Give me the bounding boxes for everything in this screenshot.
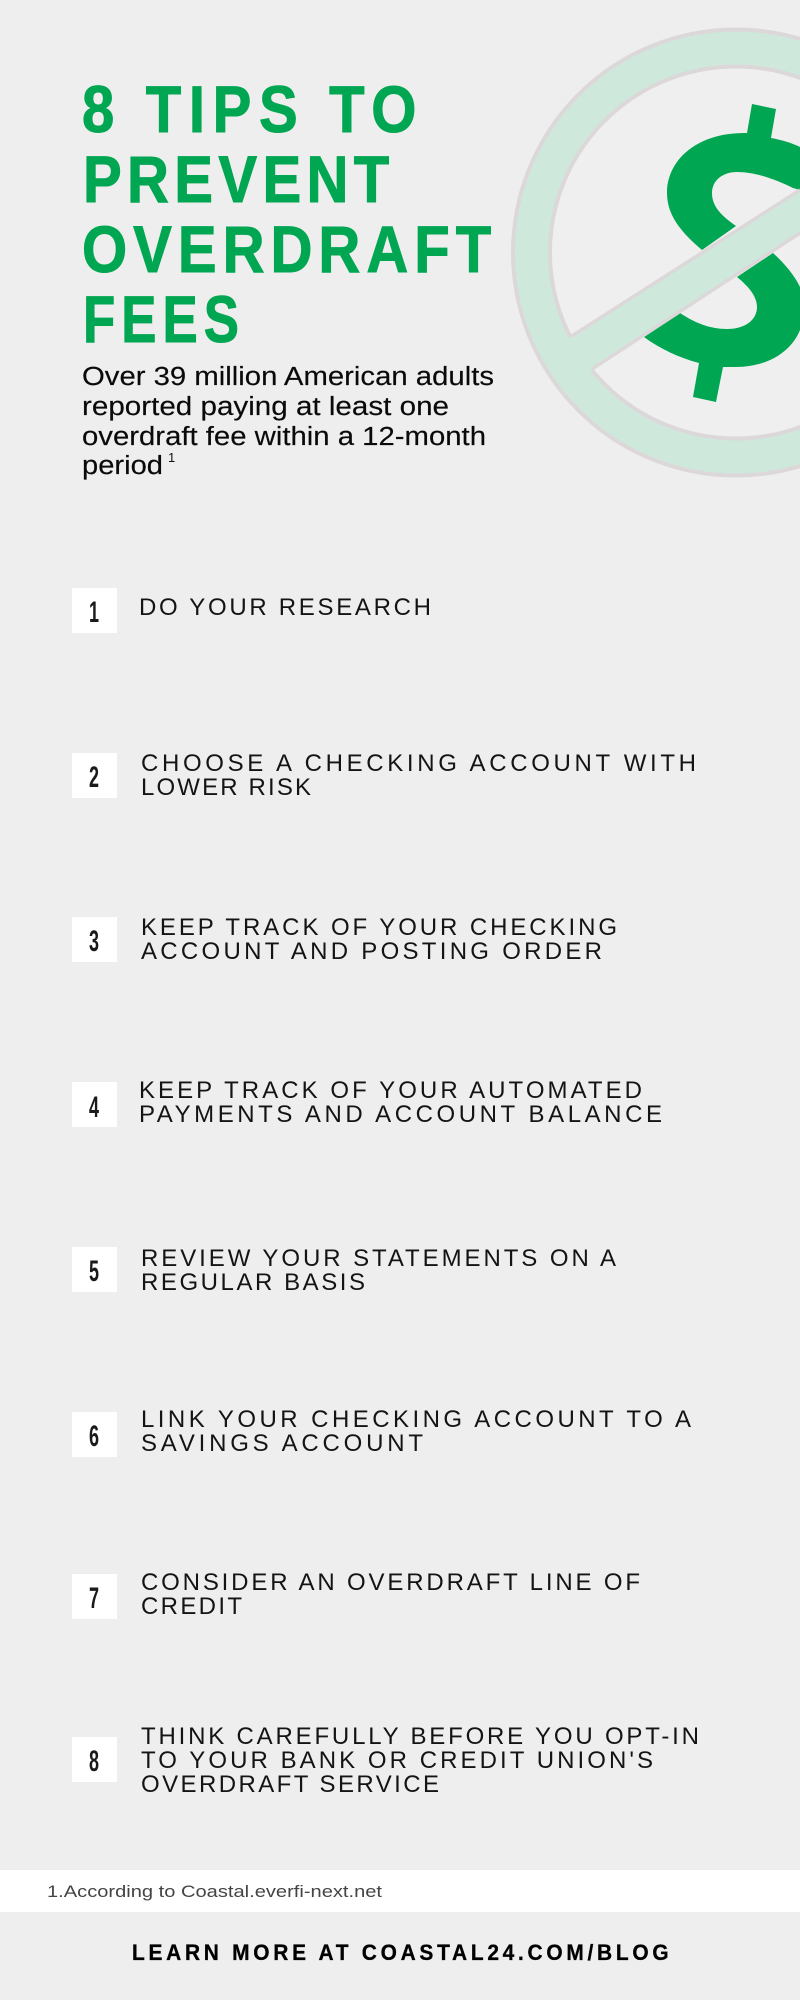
icon: crossed-out dollar sign	[513, 30, 800, 476]
tip 4	[72, 1077, 662, 1128]
number badge 7	[72, 1574, 117, 1619]
title	[82, 74, 491, 356]
number badge 3	[72, 917, 117, 962]
subtitle text block: Over 39 million American adults	[82, 363, 494, 391]
tip 1 text: DO YOUR RESEARCH	[139, 594, 431, 621]
number badge 5	[72, 1247, 117, 1292]
subtitle text block: period	[82, 452, 163, 480]
tip 5 text	[141, 1245, 616, 1296]
tip 8 text: THINK CAREFULLY BEFORE YOU OPT-IN	[141, 1723, 699, 1750]
tip 7 text	[141, 1569, 640, 1620]
tip 4 text	[139, 1077, 662, 1128]
tip 5	[72, 1245, 616, 1296]
footnote strip: 1.According to Coastal.everfi-next.net	[47, 1882, 382, 1901]
tip 3	[72, 914, 617, 965]
title: FEES	[83, 282, 239, 356]
tip 2	[72, 750, 696, 801]
tip 2 text	[141, 750, 696, 801]
tip 7 text: CREDIT	[141, 1593, 242, 1620]
tip 6	[72, 1406, 691, 1457]
number badge 3: 3	[89, 925, 99, 958]
tip 3 text: KEEP TRACK OF YOUR CHECKING	[141, 914, 617, 941]
tip 2 text: CHOOSE A CHECKING ACCOUNT WITH	[141, 750, 696, 777]
tip 8 text	[141, 1723, 699, 1798]
tip 8 text: OVERDRAFT SERVICE	[141, 1771, 439, 1798]
tip 4 text: PAYMENTS AND ACCOUNT BALANCE	[139, 1101, 662, 1128]
subtitle text block: 1	[168, 450, 175, 465]
number badge 6	[72, 1412, 117, 1457]
tip 8 text: TO YOUR BANK OR CREDIT UNION'S	[141, 1747, 653, 1774]
number badge 6: 6	[89, 1420, 99, 1453]
tip 1	[72, 588, 431, 633]
tip 3 text: ACCOUNT AND POSTING ORDER	[141, 938, 602, 965]
number badge 2: 2	[89, 761, 99, 794]
tip 5 text: REVIEW YOUR STATEMENTS ON A	[141, 1245, 616, 1272]
subtitle text block: reported paying at least one	[82, 393, 449, 421]
footnote strip	[0, 1870, 800, 1912]
number badge 5: 5	[89, 1255, 99, 1288]
tip 6 text	[141, 1406, 691, 1457]
tip 2 text: LOWER RISK	[141, 774, 311, 801]
call to action: LEARN MORE AT COASTAL24.COM/BLOG	[132, 1939, 669, 1965]
title: OVERDRAFT	[82, 214, 491, 287]
tip 4 text: KEEP TRACK OF YOUR AUTOMATED	[139, 1077, 642, 1104]
tip 6 text: SAVINGS ACCOUNT	[141, 1430, 423, 1457]
tip 6 text: LINK YOUR CHECKING ACCOUNT TO A	[141, 1406, 691, 1433]
tip 8	[72, 1723, 699, 1798]
number badge 7: 7	[89, 1582, 99, 1615]
number badge 1: 1	[89, 596, 99, 629]
number badge 4	[72, 1082, 117, 1127]
title: PREVENT	[83, 144, 389, 217]
tip 7	[72, 1569, 640, 1620]
tip 3 text	[141, 914, 617, 965]
subtitle text block: overdraft fee within a 12-month	[82, 423, 486, 451]
tip 5 text: REGULAR BASIS	[141, 1269, 365, 1296]
subtitle text block	[82, 363, 494, 480]
title: 8 TIPS TO	[82, 74, 416, 147]
tip 7 text: CONSIDER AN OVERDRAFT LINE OF	[141, 1569, 640, 1596]
number badge 1	[72, 588, 117, 633]
number badge 4: 4	[89, 1091, 99, 1124]
number badge 2	[72, 753, 117, 798]
number badge 8: 8	[89, 1745, 99, 1778]
number badge 8	[72, 1737, 117, 1782]
